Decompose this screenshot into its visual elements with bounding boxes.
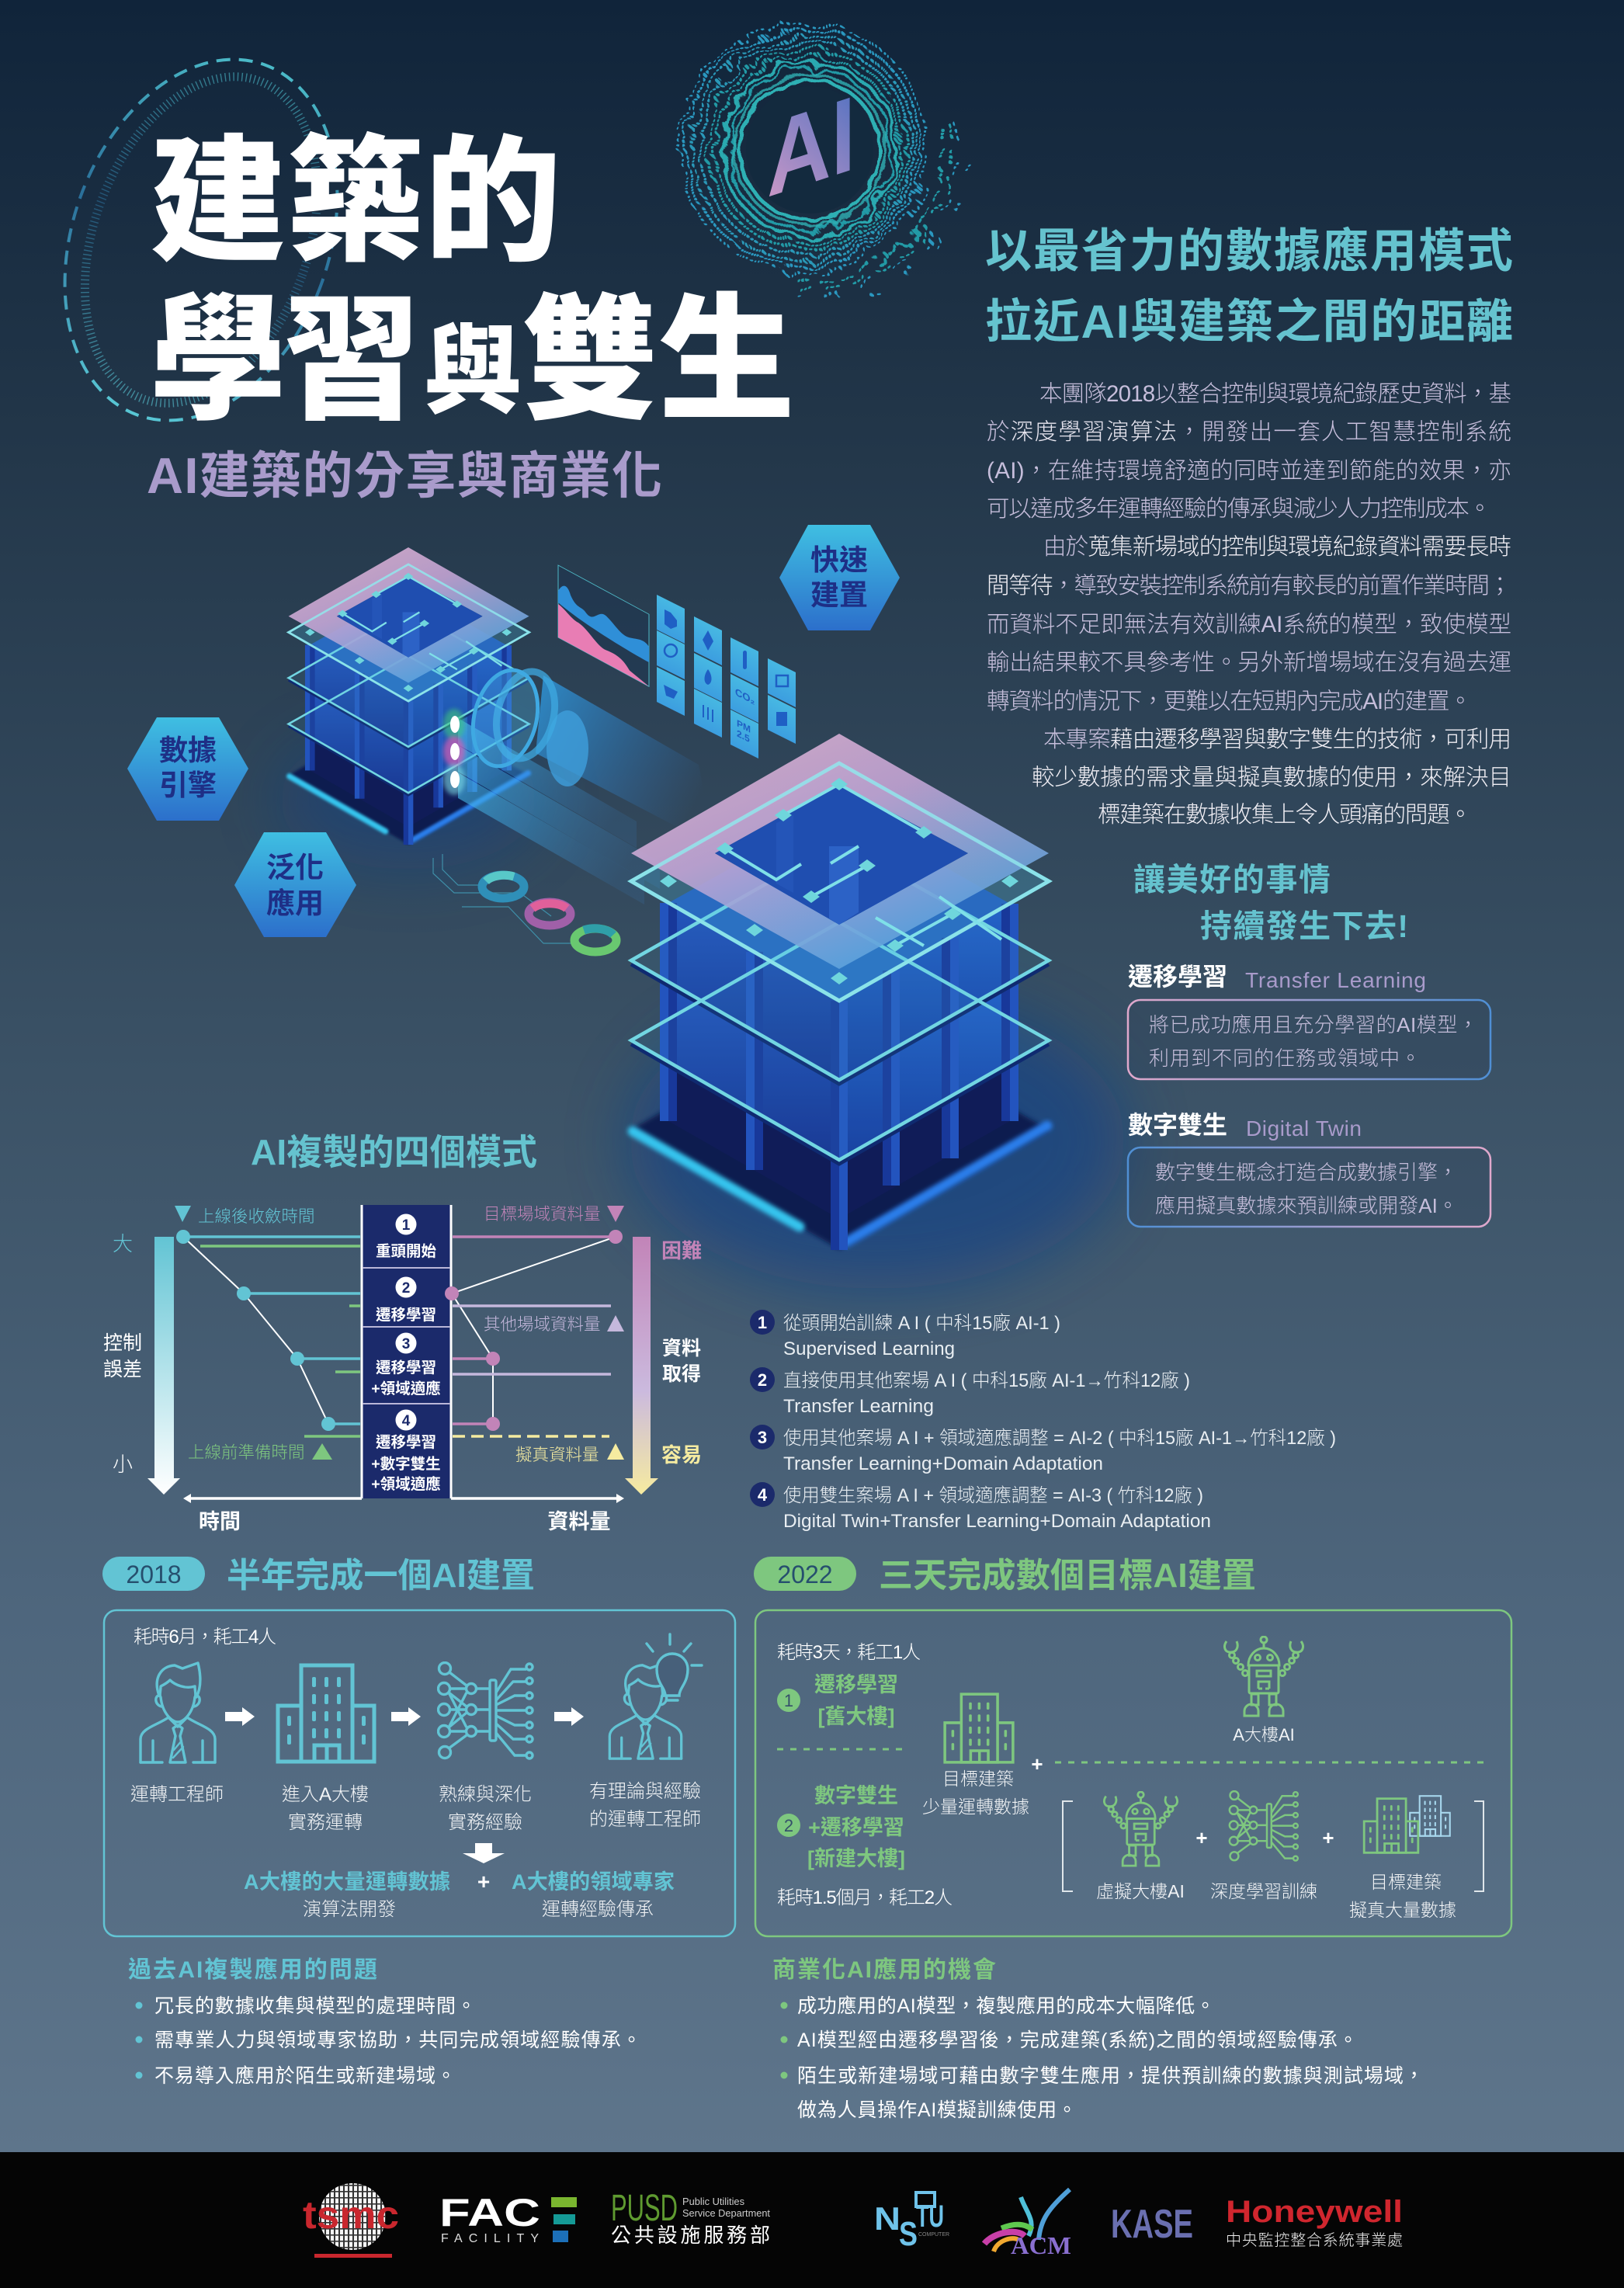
data chart panel bbox=[558, 565, 649, 686]
logo: NCTU: TU bbox=[916, 2199, 944, 2234]
panel: digital twin: 數字雙生 bbox=[1128, 1111, 1227, 1139]
chart: four modes: 其他場域資料量 bbox=[484, 1315, 601, 1334]
list: past problems: 不易導入應用於陌生或新建場域。 bbox=[154, 2065, 456, 2087]
panel: 2022 process: 數字雙生 bbox=[814, 1784, 898, 1807]
title: 雙生 bbox=[522, 285, 795, 437]
numbered list: 4 bbox=[758, 1485, 768, 1505]
panel: 2022 process: 虛擬大樓AI bbox=[1096, 1881, 1185, 1901]
chart: four modes bbox=[103, 1205, 702, 1533]
logo: PUSD: PUSD bbox=[611, 2188, 678, 2229]
panel: 2018 process: 實務運轉 bbox=[288, 1812, 363, 1833]
icon: simulated buildings bbox=[1364, 1796, 1450, 1852]
panel: 2022 process: + bbox=[1322, 1826, 1334, 1849]
panel: transfer learning: 利用到不同的任務或領域中。 bbox=[1149, 1047, 1421, 1070]
logo: PUSD: Service Department bbox=[682, 2207, 770, 2219]
panel: 2022 process: 1 bbox=[784, 1691, 793, 1710]
hexagon: 快速建置 bbox=[779, 525, 900, 630]
logo: NCTU bbox=[874, 2193, 949, 2253]
intro body text: 本專案藉由遷移學習與數字雙生的技術，可利用 bbox=[1043, 727, 1511, 752]
heading: right column: 以最省力的數據應用模式 bbox=[985, 225, 1513, 277]
icon: engineer bbox=[141, 1663, 215, 1762]
chart: four modes: 誤差 bbox=[103, 1359, 142, 1380]
numbered list: Transfer Learning+Domain Adaptation bbox=[783, 1453, 1103, 1474]
panel: 2018 process: 實務經驗 bbox=[448, 1812, 522, 1833]
centre column bbox=[362, 1205, 451, 1498]
intro body text: 可以達成多年運轉經驗的傳承與減少人力控制成本。 bbox=[987, 496, 1491, 522]
numbered list: 1 bbox=[758, 1313, 767, 1332]
panel: 2022 process: 耗時1.5個月，耗工2人 bbox=[777, 1887, 953, 1908]
logo: PUSD bbox=[611, 2188, 770, 2247]
building glow bbox=[629, 994, 1126, 1289]
centre column: 3 bbox=[402, 1336, 410, 1352]
panel: 2022 process: +遷移學習 bbox=[808, 1816, 904, 1839]
panel: 2018 process: 的運轉工程師 bbox=[589, 1809, 701, 1830]
hexagon: 數據引擎: 數據 bbox=[159, 734, 217, 766]
large building bbox=[631, 734, 1049, 1250]
centre column: 2 bbox=[402, 1280, 410, 1297]
arrows bbox=[225, 1707, 584, 1863]
title: 建築的 bbox=[150, 127, 561, 279]
chart: four modes: 資料量 bbox=[548, 1510, 610, 1533]
chart title: AI複製的四個模式 bbox=[251, 1132, 537, 1172]
panel: 2022 process: 目標建築 bbox=[942, 1769, 1014, 1789]
intro body text: (AI)，在維持環境舒適的同時並達到節能的效果，亦 bbox=[987, 458, 1511, 484]
panel: digital twin: Digital Twin bbox=[1246, 1116, 1362, 1141]
panel: 2022 process: 擬真大量數據 bbox=[1349, 1900, 1456, 1920]
panel: 2022 process: + bbox=[1031, 1752, 1043, 1776]
icon: robot bbox=[1225, 1637, 1303, 1716]
panel: transfer learning bbox=[1128, 963, 1490, 1079]
numbered list: Digital Twin+Transfer Learning+Domain Adaptation bbox=[783, 1511, 1211, 1532]
icon: experienced engineer bbox=[609, 1634, 702, 1759]
logo: FAC: FAC bbox=[439, 2191, 540, 2234]
callout heading: 持續發生下去! bbox=[1200, 908, 1408, 944]
hexagon: 快速建置: 建置 bbox=[810, 579, 868, 611]
logo: tsmc bbox=[303, 2183, 399, 2258]
intro body text: 而資料不足即無法有效訓練AI系統的模型，致使模型 bbox=[987, 612, 1511, 637]
logo: Honeywell: 中央監控整合系統事業處 bbox=[1226, 2231, 1403, 2249]
title bbox=[150, 127, 795, 437]
heading: right column bbox=[985, 225, 1513, 348]
intro body text: 轉資料的情況下，更難以在短期內完成AI的建置。 bbox=[987, 689, 1472, 714]
lens bbox=[463, 663, 564, 773]
list: opportunities: AI模型經由遷移學習後，完成建築(系統)之間的領域經驗傳承。 bbox=[797, 2029, 1358, 2051]
chart: four modes: 小 bbox=[113, 1453, 133, 1476]
chart: four modes: 擬真資料量 bbox=[515, 1446, 599, 1464]
panel: 2018 process: A大樓的領域專家 bbox=[512, 1870, 675, 1894]
list: opportunities: 陌生或新建場域可藉由數字雙生應用，提供預訓練的數據與測試場域， bbox=[797, 2065, 1424, 2087]
icon: virtual robot bbox=[1104, 1792, 1178, 1866]
icon: building bbox=[278, 1665, 374, 1762]
icon: neural network bbox=[438, 1663, 533, 1759]
centre column: 遷移學習 bbox=[376, 1359, 436, 1377]
hexagon: 快速建置: 快速 bbox=[810, 544, 868, 576]
logo: ACM bbox=[984, 2189, 1071, 2259]
footer band bbox=[0, 2152, 1624, 2288]
panel: 2022 process: [新建大樓] bbox=[807, 1847, 905, 1870]
centre column: 重頭開始 bbox=[376, 1243, 436, 1260]
icon tiles bbox=[657, 595, 796, 759]
chart: four modes: 控制 bbox=[103, 1332, 142, 1354]
panel: 2018 process bbox=[104, 1610, 735, 1936]
sensor lights bbox=[443, 709, 465, 795]
chart: four modes: 困難 bbox=[661, 1239, 702, 1262]
AI ring graphic bbox=[679, 23, 968, 300]
panel: 2018 process: + bbox=[477, 1870, 490, 1894]
list: past problems bbox=[128, 1957, 641, 2087]
icon: target building bbox=[945, 1694, 1013, 1762]
chart: four modes: 目標場域資料量 bbox=[484, 1205, 601, 1224]
small building bbox=[276, 547, 540, 870]
panel: 2018 process: 有理論與經驗 bbox=[589, 1781, 701, 1802]
panel: 2022 process: 耗時3天，耗工1人 bbox=[777, 1642, 921, 1663]
centre column: +領域適應 bbox=[371, 1380, 441, 1397]
panel: digital twin: 應用擬真數據來預訓練或開發AI。 bbox=[1155, 1194, 1458, 1217]
logo: Honeywell bbox=[1226, 2195, 1403, 2249]
right axis arrow bbox=[625, 1237, 658, 1495]
logo: ACM: ACM bbox=[1011, 2231, 1071, 2259]
logo: NCTU: COMPUTER bbox=[918, 2232, 949, 2238]
hexagon: 泛化應用: 泛化 bbox=[266, 852, 324, 884]
intro body text: 由於蒐集新場域的控制與環境紀錄資料需要長時 bbox=[1043, 534, 1511, 560]
centre column: 遷移學習 bbox=[376, 1307, 436, 1324]
logo: NCTU: N bbox=[874, 2200, 900, 2237]
logo: KASE: KASE bbox=[1111, 2202, 1193, 2247]
centre column: 遷移學習 bbox=[376, 1434, 436, 1451]
intro body text: 輸出結果較不具參考性。另外新增場域在沒有過去運 bbox=[987, 650, 1511, 675]
intro body text: 標建築在數據收集上令人頭痛的問題。 bbox=[1098, 802, 1472, 828]
left axis arrow bbox=[147, 1237, 180, 1495]
panel: 2022 process bbox=[755, 1610, 1511, 1936]
callout heading bbox=[1133, 862, 1408, 944]
hexagon: 數據引擎 bbox=[127, 717, 248, 821]
chart: four modes: 上線前準備時間 bbox=[188, 1443, 305, 1462]
logo: tsmc: tsmc bbox=[303, 2193, 399, 2237]
icon tiles: PM bbox=[737, 717, 751, 735]
panel: 2022 process: [舊大樓] bbox=[818, 1705, 894, 1728]
logo: PUSD: Public Utilities bbox=[682, 2196, 744, 2207]
logo: PUSD: 公共設施服務部 bbox=[611, 2224, 770, 2247]
hexagon: 泛化應用: 應用 bbox=[266, 887, 324, 919]
panel: 2022 process: 目標建築 bbox=[1370, 1872, 1442, 1892]
callout heading: 讓美好的事情 bbox=[1133, 862, 1331, 897]
centre column: 4 bbox=[402, 1413, 411, 1429]
intro body text: 較少數據的需求量與擬真數據的使用，來解決目 bbox=[1032, 765, 1511, 790]
numbered list: 2 bbox=[758, 1370, 767, 1390]
chart: four modes: 上線後收斂時間 bbox=[198, 1207, 315, 1226]
data rings bbox=[433, 854, 616, 952]
swirl decoration bbox=[17, 21, 385, 459]
numbered list: Supervised Learning bbox=[783, 1338, 955, 1359]
title: 與 bbox=[424, 317, 522, 426]
list: past problems: 過去AI複製應用的問題 bbox=[128, 1957, 377, 1983]
chart lines bbox=[183, 1237, 616, 1436]
panel: 2022 process: 遷移學習 bbox=[814, 1673, 898, 1696]
list: past problems: 需專業人力與領域專家協助，共同完成領域經驗傳承。 bbox=[154, 2029, 641, 2051]
panel: 2018 process: 熟練與深化 bbox=[439, 1784, 532, 1805]
intro body text: 於深度學習演算法，開發出一套人工智慧控制系統 bbox=[987, 419, 1511, 445]
heading: 2022: 三天完成數個目標AI建置 bbox=[879, 1557, 1256, 1595]
panel: 2022 process: A大樓AI bbox=[1233, 1725, 1295, 1745]
centre column: +領域適應 bbox=[371, 1475, 441, 1493]
numbered list: 使用其他案場 A I + 領域適應調整 = AI-2 ( 中科15廠 AI-1→竹科12廠 ) bbox=[783, 1428, 1336, 1449]
numbered list: 使用雙生案場 A I + 領域適應調整 = AI-3 ( 竹科12廠 ) bbox=[783, 1485, 1203, 1506]
heading: 2022: 2022 bbox=[777, 1561, 833, 1588]
chart: four modes: 大 bbox=[113, 1232, 133, 1255]
AI ring graphic: AI bbox=[767, 74, 855, 220]
panel: 2018 process: 演算法開發 bbox=[303, 1899, 396, 1920]
hexagon: 泛化應用 bbox=[234, 832, 356, 937]
chart: four modes: 容易 bbox=[661, 1443, 702, 1467]
panel: 2022 process: 2 bbox=[784, 1816, 793, 1835]
chart labels bbox=[175, 1206, 191, 1222]
title: 學習 bbox=[150, 285, 420, 437]
list: opportunities: 做為人員操作AI模擬訓練使用。 bbox=[797, 2099, 1077, 2121]
panel: 2022 process: 少量運轉數據 bbox=[922, 1797, 1029, 1817]
panel: 2018 process: 進入A大樓 bbox=[282, 1784, 369, 1805]
panel: transfer learning: 將已成功應用且充分學習的AI模型， bbox=[1149, 1013, 1478, 1036]
centre column: 1 bbox=[402, 1217, 411, 1234]
numbered list bbox=[750, 1310, 1336, 1532]
panel: 2022 process: + bbox=[1195, 1826, 1208, 1849]
logo: FAC: FACILITY bbox=[441, 2232, 539, 2245]
hexagon: 數據引擎: 引擎 bbox=[159, 769, 217, 801]
panel: 2018 process: 運轉工程師 bbox=[130, 1784, 224, 1805]
bottom axes bbox=[186, 1497, 621, 1500]
data beams bbox=[458, 675, 714, 904]
numbered list: 3 bbox=[758, 1428, 767, 1447]
numbered list: 從頭開始訓練 A I ( 中科15廠 AI-1 ) bbox=[783, 1313, 1060, 1334]
icon tiles: CO₂ bbox=[735, 686, 755, 707]
chart: four modes: 時間 bbox=[199, 1510, 241, 1533]
heading: 2018: 半年完成一個AI建置 bbox=[227, 1557, 535, 1595]
list: past problems: 冗長的數據收集與模型的處理時間。 bbox=[154, 1995, 476, 2017]
panel: digital twin: 數字雙生概念打造合成數據引擎， bbox=[1155, 1161, 1458, 1184]
panel: digital twin bbox=[1128, 1111, 1490, 1227]
numbered list: Transfer Learning bbox=[783, 1396, 934, 1417]
list: opportunities bbox=[772, 1957, 1424, 2121]
panel: transfer learning: Transfer Learning bbox=[1245, 968, 1426, 992]
intro body text: 本團隊2018以整合控制與環境紀錄歷史資料，基 bbox=[1039, 381, 1511, 407]
intro body text: 間等待，導致安裝控制系統前有較長的前置作業時間； bbox=[987, 573, 1511, 599]
icon tiles: 2.5 bbox=[737, 727, 750, 745]
logo: FAC bbox=[439, 2191, 577, 2245]
centre column: +數字雙生 bbox=[371, 1455, 441, 1473]
heading: 2018: 2018 bbox=[126, 1561, 182, 1588]
panel: 2018 process: A大樓的大量運轉數據 bbox=[244, 1870, 450, 1894]
chart: four modes: 取得 bbox=[662, 1363, 701, 1385]
panel: transfer learning: 遷移學習 bbox=[1128, 963, 1227, 991]
icon: deep learning bbox=[1230, 1791, 1298, 1861]
chart: four modes: 資料 bbox=[662, 1338, 701, 1359]
logo: Honeywell: Honeywell bbox=[1226, 2195, 1403, 2229]
list: opportunities: 成功應用的AI模型，複製應用的成本大幅降低。 bbox=[797, 1995, 1215, 2017]
logo: NCTU: S bbox=[899, 2215, 918, 2253]
heading: right column: 拉近AI與建築之間的距離 bbox=[985, 296, 1513, 348]
list: opportunities: 商業化AI應用的機會 bbox=[772, 1957, 996, 1983]
numbered list: 直接使用其他案場 A I ( 中科15廠 AI-1→竹科12廠 ) bbox=[783, 1370, 1190, 1391]
subtitle: AI建築的分享與商業化 bbox=[147, 447, 662, 504]
panel: 2022 process: 深度學習訓練 bbox=[1210, 1881, 1317, 1901]
panel: 2018 process: 運轉經驗傳承 bbox=[542, 1899, 654, 1920]
panel: 2018 process: 耗時6月，耗工4人 bbox=[134, 1627, 276, 1647]
intro body text bbox=[987, 381, 1511, 828]
